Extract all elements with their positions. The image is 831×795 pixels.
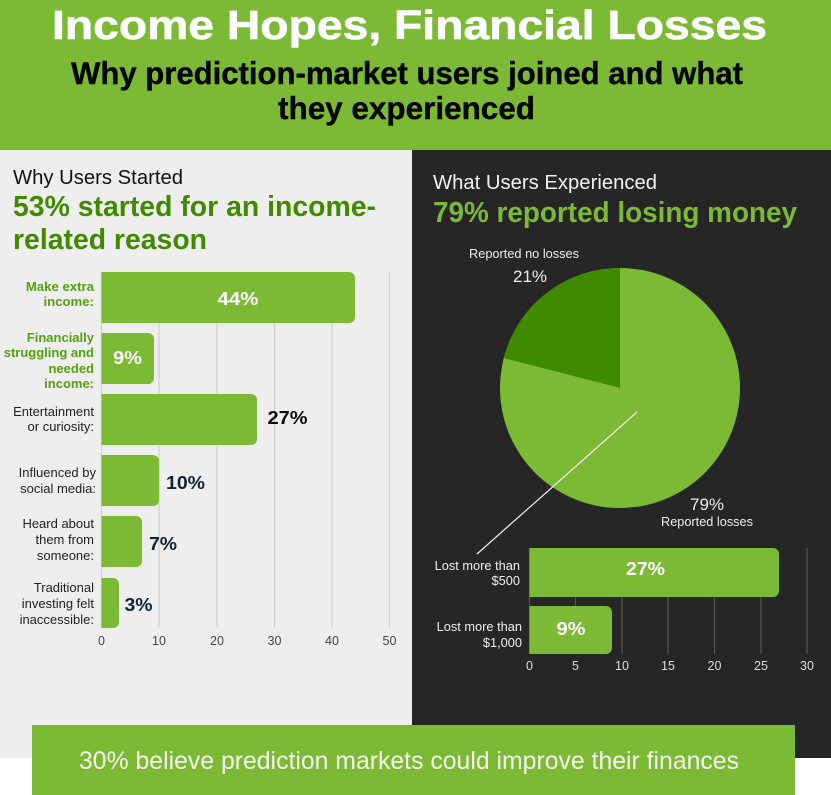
panel headline: 53% started for an income- [13, 191, 376, 223]
bar: financially struggling [4, 330, 154, 391]
bar: traditional investing: inaccessible: [20, 612, 94, 627]
bar: financially struggling: 9% [113, 348, 142, 368]
x axis labels [526, 659, 814, 673]
label: no losses [469, 247, 579, 286]
x axis labels: 0 [98, 634, 105, 648]
bar: traditional investing [20, 578, 152, 628]
subtitle: Why prediction-market users joined and what [71, 55, 743, 91]
bar: entertainment: Entertainment [13, 404, 94, 419]
bar: heard from someone: them from [35, 532, 94, 547]
bar: entertainment [13, 394, 308, 445]
leader line [477, 412, 637, 554]
panel headline [13, 191, 376, 256]
panel heading: Why Users Started [13, 166, 183, 189]
label: no losses: Reported no losses [469, 247, 579, 261]
title: Income Hopes, Financial Losses [52, 2, 767, 48]
panel: what users experienced [412, 150, 831, 758]
bar: financially struggling: Financially [27, 330, 95, 345]
panel headline: 79% reported losing money [433, 197, 797, 229]
x axis labels: 30 [800, 659, 814, 673]
bar: financially struggling: income: [44, 376, 94, 391]
bar: lost more than 500: 27% [626, 559, 665, 579]
bar: social media [19, 455, 205, 506]
bar: lost more than 1000: Lost more than [437, 619, 522, 634]
label: losses: Reported losses [661, 515, 753, 529]
callout banner [32, 725, 795, 795]
x axis labels: 25 [754, 659, 768, 673]
x axis labels: 30 [268, 634, 281, 648]
label: losses: 79% [690, 495, 724, 514]
x axis labels: 20 [708, 659, 721, 673]
panel headline: related reason [13, 224, 207, 256]
bar: financially struggling: needed [48, 361, 94, 376]
bar: heard from someone: someone: [37, 548, 94, 563]
bar: heard from someone: Heard about [22, 516, 94, 531]
label: losses [661, 495, 753, 529]
bar: traditional investing: investing felt [22, 596, 94, 611]
x axis labels [98, 634, 396, 648]
bar: social media: social media: [20, 481, 96, 496]
x axis labels: 5 [572, 659, 579, 673]
x axis labels: 10 [152, 634, 166, 648]
x axis labels: 20 [210, 634, 224, 648]
pie chart [477, 268, 740, 554]
bar: lost more than 1000: $1,000 [483, 635, 522, 650]
bar: social media: 10% [166, 473, 205, 493]
bar chart: reasons [4, 272, 396, 648]
bar: make extra income: Make extra [26, 279, 95, 294]
panel: why users started [0, 150, 412, 758]
bar: make extra income [26, 272, 355, 323]
bar chart: amount lost [435, 548, 814, 673]
callout banner: 30% believe prediction markets could improve their finances [79, 747, 739, 775]
bar: traditional investing: 3% [124, 595, 152, 615]
x axis labels: 15 [661, 659, 675, 673]
bar: lost more than 1000: 9% [556, 619, 586, 639]
bar: lost more than 1000 [437, 606, 612, 654]
x axis labels: 10 [615, 659, 629, 673]
x axis labels: 0 [526, 659, 533, 673]
panel heading: What Users Experienced [433, 171, 657, 194]
x axis labels: 40 [325, 634, 339, 648]
bar: entertainment: or curiosity: [28, 419, 94, 434]
bar: social media: Influenced by [19, 465, 96, 480]
bar: lost more than 500: $500 [492, 573, 520, 588]
bar: entertainment: 27% [268, 408, 308, 428]
header banner [0, 0, 831, 150]
subtitle [71, 55, 743, 126]
x axis labels: 50 [383, 634, 396, 648]
bar: make extra income: 44% [218, 289, 258, 309]
bar: heard from someone: 7% [149, 534, 177, 554]
bar: traditional investing: Traditional [34, 580, 94, 595]
bar: make extra income: income: [43, 294, 94, 309]
bar: financially struggling: struggling and [4, 345, 94, 360]
subtitle: they experienced [278, 90, 535, 126]
bar: lost more than 500: Lost more than [435, 558, 520, 573]
label: no losses: 21% [513, 267, 547, 286]
bar: lost more than 500 [435, 548, 779, 597]
bar: heard from someone [22, 516, 177, 567]
